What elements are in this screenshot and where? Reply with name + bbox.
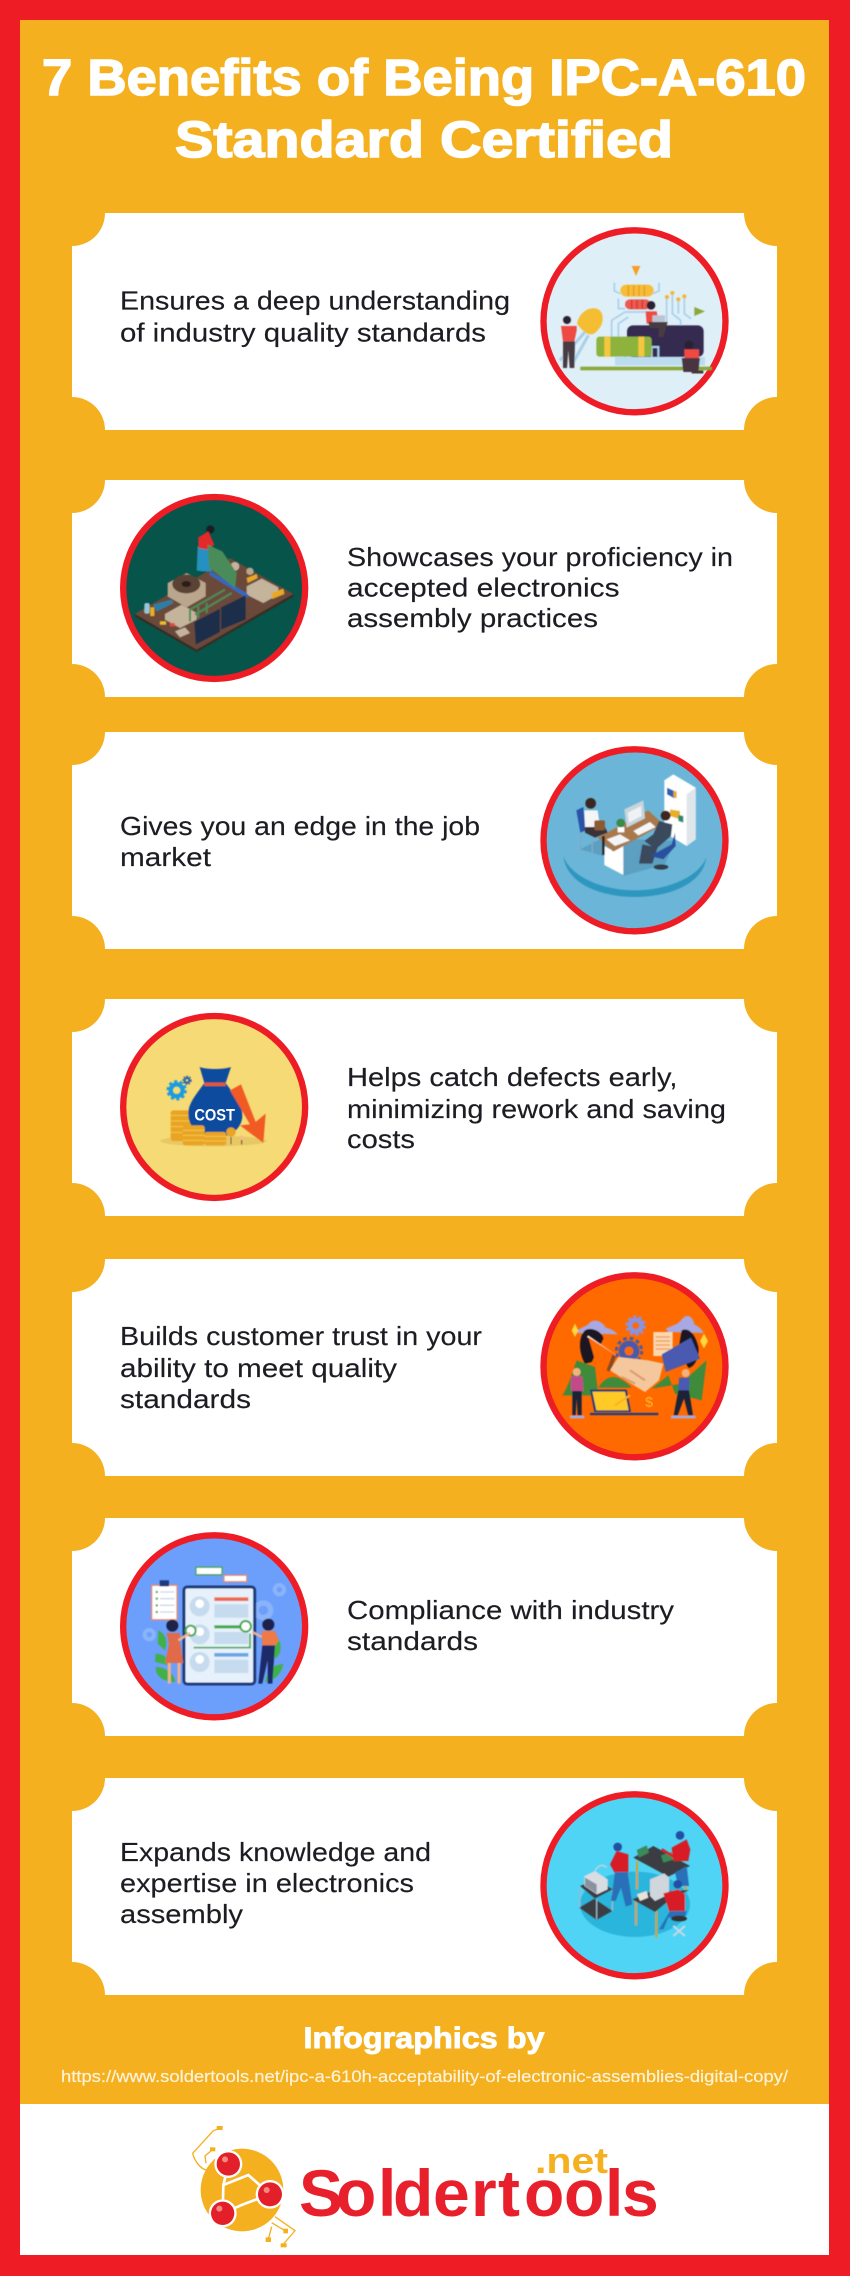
icon: cost reduction money bag bbox=[123, 1016, 305, 1198]
card shape bbox=[72, 732, 777, 949]
card shape bbox=[72, 1518, 777, 1736]
panel: benefit 3 bbox=[72, 732, 777, 949]
title: Standard Certified bbox=[175, 111, 673, 168]
text: benefit 5 bbox=[120, 1321, 482, 1414]
panel: benefit 7 bbox=[72, 1778, 777, 1995]
logo suffix: .net bbox=[535, 2140, 608, 2181]
icon: job interview at desk bbox=[543, 749, 725, 931]
label: dollar sign: $ bbox=[645, 1395, 653, 1411]
icon: technicians assembling electronics bbox=[543, 1794, 725, 1976]
text: benefit 5: ability to meet quality bbox=[120, 1353, 397, 1383]
text: benefit 1: Ensures a deep understanding bbox=[120, 286, 510, 316]
icon: circuit board with technician bbox=[123, 497, 305, 679]
text: benefit 5: Builds customer trust in your bbox=[120, 1321, 482, 1351]
text: benefit 1: of industry quality standards bbox=[120, 318, 486, 348]
text: benefit 4: costs bbox=[347, 1124, 415, 1154]
card shape bbox=[72, 480, 777, 697]
text: benefit 2: Showcases your proficiency in bbox=[347, 542, 733, 572]
card shape bbox=[72, 999, 777, 1216]
text: benefit 2: assembly practices bbox=[347, 603, 598, 633]
text: benefit 6: Compliance with industry bbox=[347, 1595, 674, 1625]
panel: benefit 4 bbox=[72, 999, 777, 1216]
text: benefit 4: minimizing rework and saving bbox=[347, 1094, 726, 1124]
text: benefit 2 bbox=[347, 542, 733, 633]
text: benefit 4: Helps catch defects early, bbox=[347, 1062, 678, 1092]
icon: solder globe bbox=[193, 2126, 295, 2247]
card shape bbox=[72, 1778, 777, 1995]
text: benefit 3: market bbox=[120, 842, 212, 872]
footer panel bbox=[20, 2104, 829, 2255]
title: 7 Benefits of Being IPC-A-610 bbox=[42, 49, 806, 106]
title bbox=[42, 49, 806, 168]
source url: https://www.soldertools.net/ipc-a-610h-acceptability-of-electronic-assemblies-digital-copy/ bbox=[61, 2067, 788, 2086]
panel: benefit 6 bbox=[72, 1518, 777, 1736]
card shape bbox=[72, 213, 777, 430]
icon: electronic components and workers bbox=[543, 230, 725, 412]
text: benefit 7: assembly bbox=[120, 1899, 243, 1929]
panel: benefit 1 bbox=[72, 213, 777, 430]
text: benefit 7: expertise in electronics bbox=[120, 1868, 414, 1898]
text: benefit 6: standards bbox=[347, 1626, 478, 1656]
credit heading: Infographics by bbox=[304, 2022, 545, 2055]
text: benefit 7 bbox=[120, 1837, 431, 1929]
text: benefit 2: accepted electronics bbox=[347, 572, 620, 602]
text: benefit 3: Gives you an edge in the job bbox=[120, 811, 480, 841]
label: COST: COST bbox=[194, 1105, 235, 1124]
logo: Soldertools.net bbox=[193, 2126, 659, 2247]
text: benefit 3 bbox=[120, 811, 480, 872]
panel: benefit 5 bbox=[72, 1259, 777, 1476]
text: benefit 4 bbox=[347, 1062, 726, 1154]
text: benefit 5: standards bbox=[120, 1384, 251, 1414]
card shape bbox=[72, 1259, 777, 1476]
panel: benefit 2 bbox=[72, 480, 777, 697]
logo wordmark: Soldertools bbox=[299, 2156, 659, 2230]
icon: compliance review board bbox=[123, 1535, 305, 1717]
text: benefit 1 bbox=[120, 286, 510, 348]
text: benefit 6 bbox=[347, 1595, 674, 1656]
icon: handshake bbox=[543, 1275, 725, 1457]
text: benefit 7: Expands knowledge and bbox=[120, 1837, 431, 1867]
